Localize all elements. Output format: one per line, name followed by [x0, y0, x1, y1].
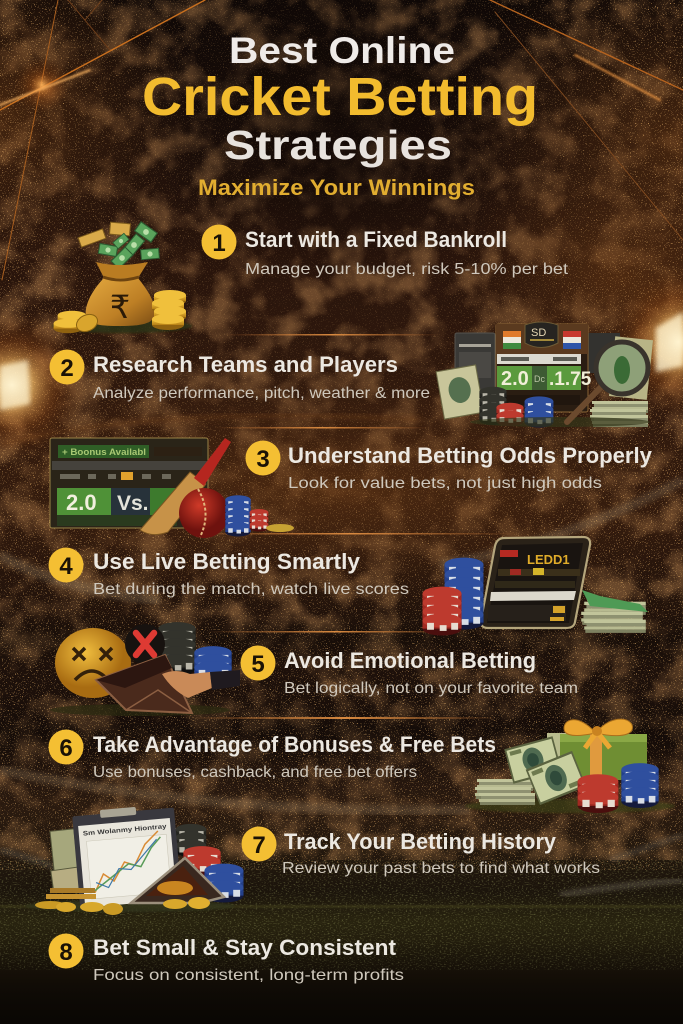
step 7: [242, 826, 600, 877]
title: Strategies: [224, 122, 452, 168]
step 4: [48, 548, 409, 598]
icon: odds board with bat and ball: Vs.: [117, 492, 149, 515]
title: Best Online: [229, 30, 455, 71]
title: Cricket Betting: [142, 67, 538, 127]
icon: betting history clipboard with chips, wallet and coins: [25, 804, 244, 915]
icon: money bag with notes and coins: ₹: [110, 288, 130, 326]
step 8: [48, 934, 404, 984]
step 5: Avoid Emotional Betting: [284, 648, 536, 673]
step 1: 1: [212, 230, 226, 257]
step 2: Research Teams and Players: [93, 352, 398, 377]
icon: sad emoji, X badge, chips and empty wallet: [50, 622, 240, 716]
icon: phone with live betting app, chips and money: [422, 537, 648, 636]
icon: odds dashboard with magnifier, money and chips: .1.75: [549, 369, 592, 390]
step 8: Bet Small & Stay Consistent: [93, 935, 397, 960]
icon: phone with live betting app, chips and money: LEDD1: [527, 552, 570, 567]
step 2: [50, 350, 430, 402]
icon: odds dashboard with magnifier, money and chips: 2.0: [501, 368, 529, 390]
icon: odds dashboard with magnifier, money and chips: SD: [531, 327, 546, 339]
step 3: Look for value bets, not just high odds: [288, 475, 602, 492]
title: [142, 30, 538, 200]
step 6: Take Advantage of Bonuses & Free Bets: [93, 732, 496, 757]
step 1: Manage your budget, risk 5-10% per bet: [245, 261, 569, 278]
step 4: 4: [59, 553, 73, 580]
icon: betting history clipboard with chips, wallet and coins: Sm Wolanmy Hiontray: [83, 823, 167, 838]
step 2: Analyze performance, pitch, weather & more: [93, 385, 430, 402]
step 6: Use bonuses, cashback, and free bet offers: [93, 764, 417, 781]
step 6: [48, 730, 496, 781]
step 8: Focus on consistent, long-term profits: [93, 967, 404, 984]
step 5: [240, 646, 578, 697]
icon: money bag with notes and coins: [52, 222, 192, 335]
step 4: Use Live Betting Smartly: [93, 549, 361, 574]
light streaks: [0, 0, 683, 280]
step 2: 2: [60, 355, 74, 382]
step 1: Start with a Fixed Bankroll: [245, 227, 507, 252]
step 6: 6: [59, 735, 73, 762]
step 3: [246, 440, 653, 492]
step 7: Review your past bets to find what works: [282, 860, 600, 877]
step 3: Understand Betting Odds Properly: [288, 443, 653, 468]
icon: odds dashboard with magnifier, money and chips: Dc: [534, 374, 545, 384]
step 4: Bet during the match, watch live scores: [93, 581, 409, 598]
stadium floodlights: [0, 267, 683, 460]
icon: odds board with bat and ball: 2.0: [66, 490, 97, 515]
icon: odds board with bat and ball: [50, 438, 294, 538]
title: Maximize Your Winnings: [198, 175, 475, 200]
step 7: Track Your Betting History: [284, 829, 557, 854]
step 5: 5: [251, 651, 265, 678]
step 7: 7: [252, 832, 266, 859]
step 8: 8: [59, 939, 73, 966]
icon: gift box with money and chips: [465, 719, 675, 813]
dividers: [180, 334, 520, 719]
icon: odds board with bat and ball: + Boonus Availabl: [62, 447, 146, 458]
icon: odds dashboard with magnifier, money and chips: [436, 322, 653, 428]
step 5: Bet logically, not on your favorite team: [284, 680, 578, 697]
step 3: 3: [256, 446, 270, 473]
step 1: [202, 224, 569, 278]
